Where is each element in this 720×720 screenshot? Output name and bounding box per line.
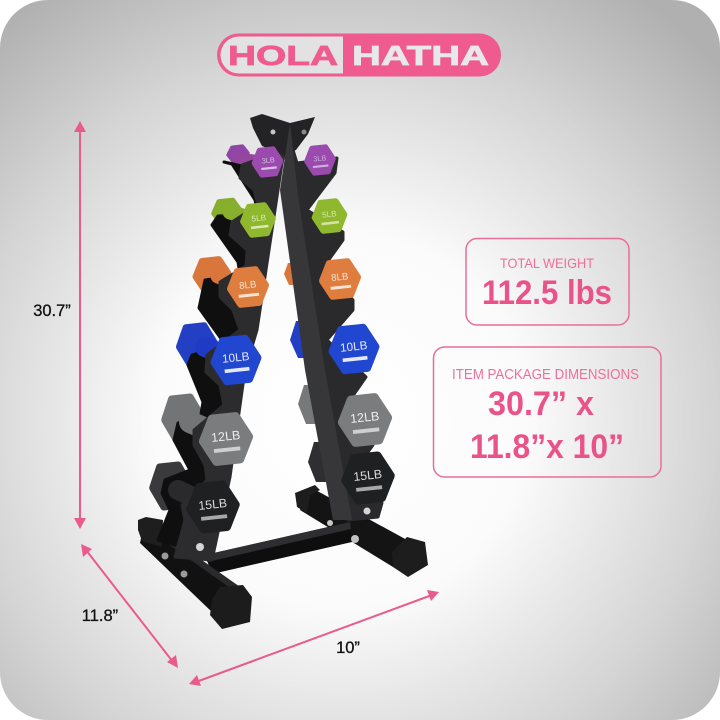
logo: Hola Hatha: HOLA (228, 40, 338, 71)
dumbbell: 15LB left (188, 484, 238, 530)
dumbbell: 3LB left: 3LB (261, 155, 275, 165)
arrow: height (74, 121, 86, 529)
dumbbell: 12LB right: 12LB (349, 409, 380, 426)
dumbbell: 10LB right (331, 327, 377, 371)
dumbbell: 3LB right (305, 146, 335, 174)
dumbbell: 5LB right: 5LB (322, 209, 338, 220)
dumbbell: 15LB right: 15LB (353, 467, 383, 484)
dumbbell: 5LB left: 5LB (251, 213, 267, 224)
logo: Hola Hatha: HATHA (352, 40, 489, 71)
dumbbell: 12LB left: 12LB (210, 428, 241, 445)
logo: Hola Hatha (217, 34, 501, 76)
dumbbell: 8LB right (321, 261, 359, 297)
dumbbell: 8LB right: 8LB (331, 271, 349, 284)
dimensions caption: ITEM PACKAGE DIMENSIONS (452, 367, 639, 383)
total weight caption: TOTAL WEIGHT (500, 255, 594, 271)
dumbbell: 3LB right: 3LB (313, 153, 327, 164)
dimensions value line 2: 11.8”x 10” (470, 428, 624, 466)
right side dumbbell rear slivers (284, 263, 335, 482)
label: depth: 11.8” (82, 607, 118, 625)
top mounting plate (250, 114, 315, 155)
right rack panel (290, 140, 382, 520)
dumbbell: 10LB left (213, 338, 259, 382)
arrow: depth (81, 544, 178, 668)
dimensions value line 1: 30.7” x (488, 385, 594, 423)
dumbbell: 5LB right (313, 200, 346, 232)
dumbbell: 10LB left: 10LB (221, 350, 250, 366)
panel: package dimensions (434, 347, 661, 477)
panel: total weight (466, 238, 629, 325)
rack base (138, 485, 428, 629)
label: height: 30.7” (33, 302, 71, 320)
bolt (196, 543, 204, 551)
dumbbell: 5LB left (242, 204, 274, 236)
dumbbell: 15LB left: 15LB (198, 496, 228, 513)
dumbbell handles (178, 158, 262, 505)
left front rack panel (175, 150, 284, 560)
arrow: width (189, 590, 439, 686)
label: width: 10” (336, 639, 360, 657)
dumbbell: 12LB right (340, 396, 390, 444)
dumbbell: 10LB right: 10LB (339, 339, 368, 355)
left rear rack panel (158, 150, 285, 545)
total weight value: 112.5 lbs (482, 274, 612, 312)
bolt (364, 508, 370, 514)
dumbbell: 12LB left (201, 415, 251, 463)
dumbbell: 3LB left (253, 148, 282, 176)
dumbbell: 8LB left (229, 269, 267, 305)
dumbbell: 15LB right (343, 455, 393, 501)
dumbbell: 8LB left: 8LB (239, 279, 257, 292)
dumbbell rack (138, 114, 428, 629)
left side dumbbell back heads (151, 145, 249, 507)
front centre rack leg (280, 123, 352, 520)
